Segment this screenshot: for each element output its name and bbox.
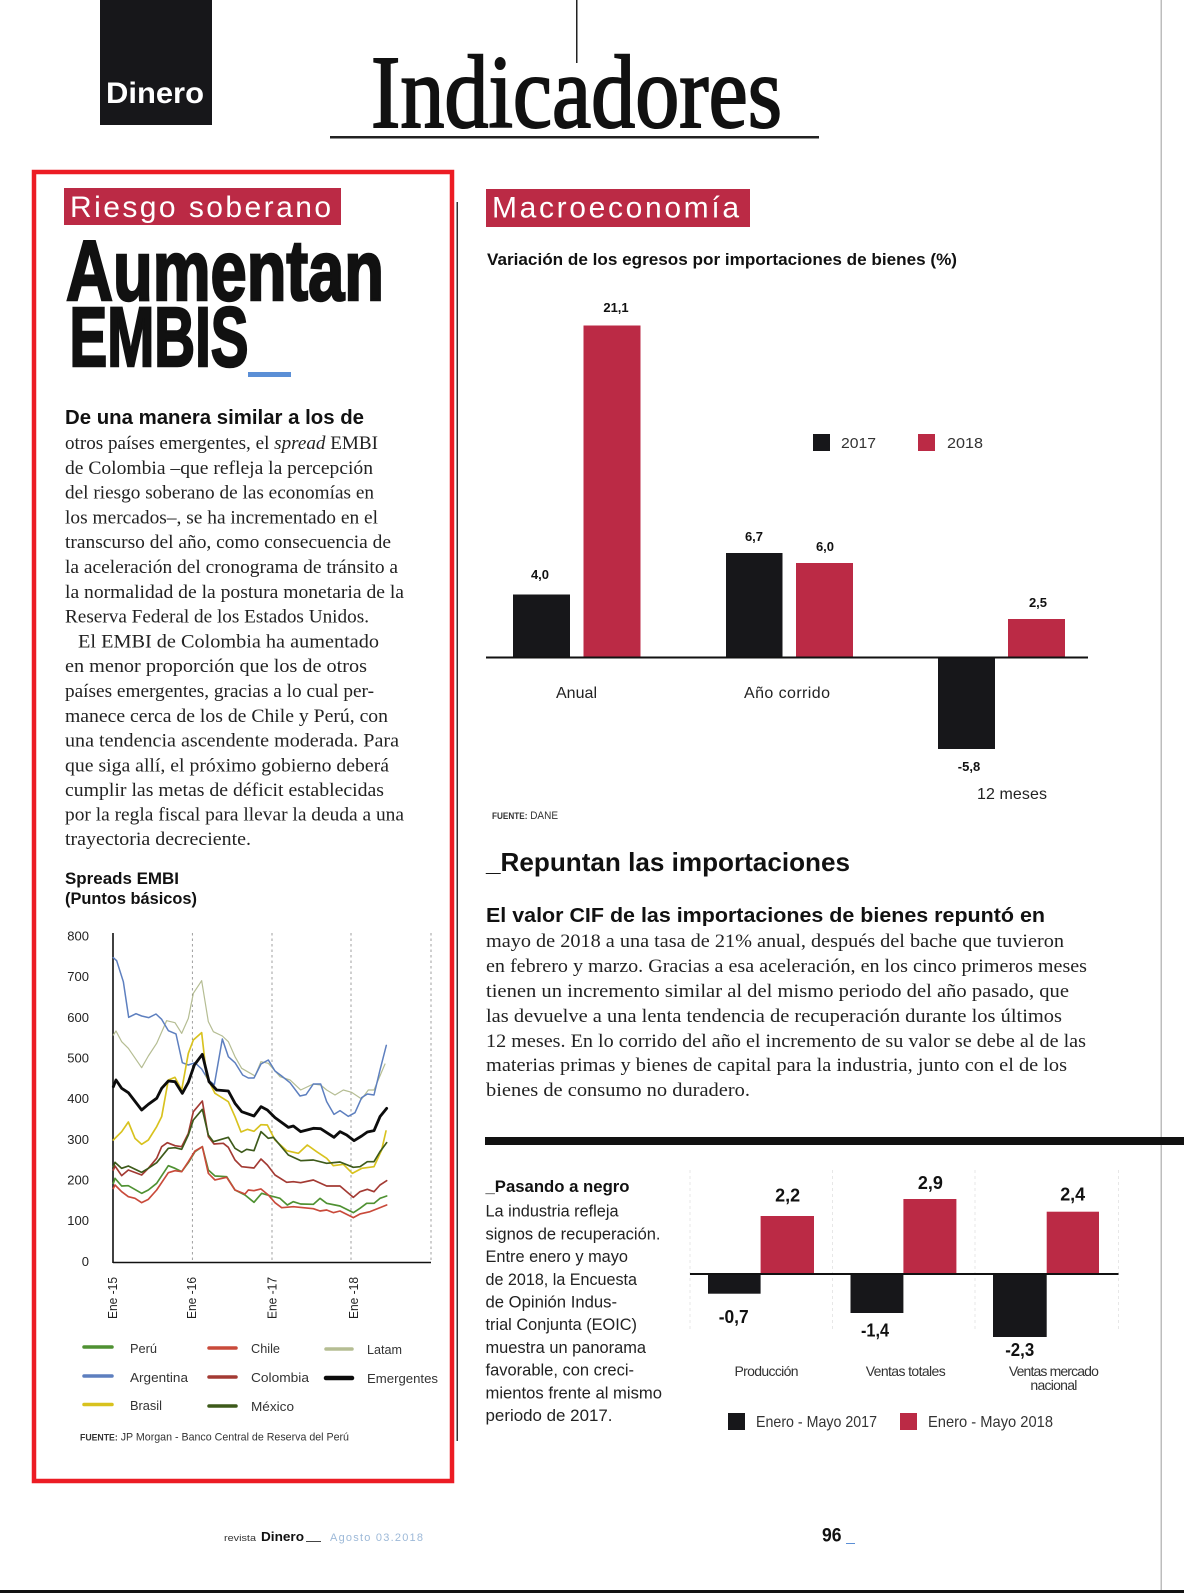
chart title: Spreads EMBI: (Puntos básicos): [65, 889, 197, 908]
article text: imports: mayo de 2018 a una tasa de 21% anual, después del bache que tuvieron: [486, 931, 1065, 952]
footer: magazine line and page number: [224, 1526, 855, 1547]
headline: Aumentan EMBIS: Aumentan: [66, 224, 384, 319]
y axis labels: 200: [67, 1172, 89, 1188]
article text: EMBI: países emergentes, gracias a lo cual per-: [65, 681, 374, 702]
bar chart: industry: Producción: [734, 1363, 798, 1379]
bar chart: imports variation: -5,8: [958, 759, 980, 774]
article text: EMBI: de Colombia –que refleja la percepción: [65, 458, 374, 479]
article text: EMBI: [65, 407, 405, 850]
y axis labels: 100: [67, 1213, 89, 1228]
chart legend: [728, 1413, 1053, 1431]
article text: EMBI: que siga allí, el próximo gobierno deberá: [65, 755, 390, 776]
headline: Aumentan EMBIS: [66, 224, 384, 384]
section tag: Riesgo soberano: Riesgo soberano: [70, 191, 331, 224]
sidebar text: Pasando a negro: Entre enero y mayo: [486, 1247, 628, 1266]
chart legend: Enero - Mayo 2018: [928, 1414, 1053, 1431]
y axis labels: 300: [67, 1132, 89, 1147]
bar chart: imports variation: 21,1: [603, 300, 629, 315]
bar chart: industry: 2,2: [775, 1186, 800, 1206]
y axis labels: 800: [67, 928, 89, 943]
sidebar text: Pasando a negro: mientos frente al mismo: [486, 1383, 662, 1402]
article text: EMBI: en menor proporción que los de otros: [65, 656, 367, 677]
article text: EMBI: los mercados–, se ha incrementado en el: [65, 507, 378, 528]
article text: EMBI: manece cerca de los de Chile y Perú, con: [65, 706, 389, 727]
footer: magazine line and page number: Agosto 03.2018: [330, 1532, 423, 1544]
section tag: Macroeconomía: Macroeconomía: [492, 192, 739, 224]
chart legend: Perú: [130, 1341, 157, 1356]
article text: EMBI: cumplir las metas de déficit establecidas: [65, 780, 384, 801]
chart title: Spreads EMBI: [65, 869, 197, 908]
bar chart: industry: -2,3: [1005, 1340, 1034, 1360]
article text: EMBI: transcurso del año, como consecuencia de: [65, 532, 391, 553]
bar chart: imports variation: [486, 300, 1088, 803]
chart legend: 2018: [947, 435, 983, 452]
sidebar text: Pasando a negro: periodo de 2017.: [486, 1406, 612, 1425]
chart legend: [813, 434, 983, 452]
chart legend: Emergentes: [367, 1371, 439, 1386]
sidebar text: Pasando a negro: [485, 1177, 662, 1425]
source note: FUENTE: JP Morgan - Banco Central de Reserva del Perú: [80, 1432, 349, 1444]
article text: imports: materias primas y bienes de capital para la industria, junto con el de los: [486, 1055, 1067, 1076]
bar chart: imports variation: 2,5: [1029, 595, 1047, 610]
bar chart: imports variation: Año corrido: [744, 685, 830, 702]
footer: magazine line and page number: 96: [822, 1526, 842, 1547]
y axis labels: 700: [67, 969, 89, 984]
sidebar text: Pasando a negro: muestra un panorama: [486, 1338, 647, 1357]
y axis labels: 0: [82, 1254, 89, 1269]
bar chart: industry: 2,9: [918, 1173, 943, 1193]
bar chart: industry: Ventas totales: [866, 1363, 946, 1379]
chart legend: Chile: [251, 1341, 280, 1356]
chart legend: Brasil: [130, 1398, 162, 1413]
chart legend: [84, 1341, 439, 1414]
article text: imports: bienes de consumo no duradero.: [486, 1080, 750, 1101]
article text: EMBI: trayectoria decreciente.: [65, 829, 251, 850]
article text: EMBI: El EMBI de Colombia ha aumentado: [78, 631, 379, 652]
chart legend: Argentina: [130, 1370, 189, 1385]
bar chart: industry: -0,7: [719, 1307, 749, 1327]
y axis labels: 600: [67, 1010, 89, 1025]
line chart: Spreads EMBI: [67, 928, 431, 1319]
bar chart: imports variation: 12 meses: [977, 786, 1047, 803]
article text: imports: El valor CIF de las importaciones de bienes repuntó en: [486, 905, 1045, 927]
x axis labels: Ene -15: [105, 1277, 120, 1319]
sidebar text: Pasando a negro: favorable, con creci-: [486, 1361, 634, 1380]
article text: imports: [486, 905, 1087, 1101]
chart legend: México: [251, 1399, 294, 1414]
headline: Aumentan EMBIS: EMBIS: [70, 290, 248, 384]
y axis labels: 500: [67, 1050, 89, 1066]
panel: Riesgo soberano: [34, 172, 452, 1481]
article text: imports: 12 meses. En lo corrido del año el incremento de su valor se debe al de las: [486, 1031, 1086, 1052]
bar chart: imports variation: Anual: [556, 685, 597, 702]
article text: EMBI: del riesgo soberano de las economías en: [65, 483, 374, 504]
y axis labels: 400: [67, 1091, 89, 1106]
article text: EMBI: una tendencia ascendente moderada. Para: [65, 731, 400, 752]
article text: imports: tienen un incremento similar al del mismo periodo del año pasado, que: [486, 981, 1069, 1002]
y axis labels: [67, 928, 89, 1269]
footer: magazine line and page number: revista: [224, 1533, 257, 1544]
bar chart: imports variation: 6,0: [816, 539, 834, 554]
source note: FUENTE: DANE: [492, 810, 558, 822]
heading: Repuntan las importaciones: _Repuntan las importaciones: [485, 847, 850, 877]
chart legend: Latam: [367, 1342, 402, 1357]
x axis labels: Ene -16: [184, 1277, 199, 1319]
article text: EMBI: por la regla fiscal para llevar la deuda a una: [65, 804, 405, 825]
sidebar text: Pasando a negro: signos de recuperación.: [486, 1224, 660, 1243]
chart legend: Enero - Mayo 2017: [756, 1414, 877, 1431]
sidebar text: Pasando a negro: de 2018, la Encuesta: [486, 1270, 638, 1289]
footer: magazine line and page number: Dinero: [261, 1529, 304, 1544]
article text: imports: en febrero y marzo. Gracias a esa aceleración, en los cinco primeros meses: [486, 956, 1087, 977]
x axis labels: Ene -18: [346, 1277, 361, 1319]
article text: EMBI: Reserva Federal de los Estados Unidos.: [65, 607, 369, 628]
chart title: Spreads EMBI: Spreads EMBI: [65, 869, 179, 888]
bar chart: industry: 2,4: [1060, 1185, 1085, 1205]
data series: [113, 958, 387, 1218]
bar chart: imports variation: 6,7: [745, 529, 763, 544]
header: section tab Dinero: [100, 0, 212, 125]
sidebar text: Pasando a negro: trial Conjunta (EOIC): [486, 1315, 637, 1334]
article text: EMBI: la aceleración del cronograma de tránsito a: [65, 557, 399, 578]
panel: Macroeconomía: [485, 189, 1184, 1431]
sidebar text: Pasando a negro: La industria refleja: [486, 1202, 619, 1221]
bar chart: industry: [690, 1170, 1118, 1431]
chart title: imports: Variación de los egresos por importaciones de bienes (%): [487, 250, 957, 269]
chart legend: 2017: [841, 435, 876, 452]
bar chart: imports variation: 4,0: [531, 567, 549, 582]
x axis labels: Ene -17: [265, 1277, 280, 1319]
bar chart: industry: Ventas mercado: [1009, 1363, 1099, 1379]
bar chart: industry: -1,4: [861, 1321, 889, 1341]
article text: imports: las devuelve a una lenta tendencia de recuperación durante los últimos: [486, 1006, 1062, 1027]
sidebar text: Pasando a negro: de Opinión Indus-: [486, 1293, 617, 1312]
article text: EMBI: la normalidad de la postura monetaria de la: [65, 582, 405, 603]
chart legend: Colombia: [251, 1370, 310, 1385]
header: section tab Dinero: Dinero: [106, 77, 204, 110]
article text: EMBI: De una manera similar a los de: [65, 407, 364, 429]
article text: EMBI: otros países emergentes, el spread EMBI: [65, 433, 378, 454]
sidebar text: Pasando a negro: _Pasando a negro: [485, 1177, 630, 1196]
x axis labels: [105, 1277, 361, 1319]
title: Indicadores: Indicadores: [371, 35, 782, 150]
bar chart: industry: nacional: [1030, 1377, 1077, 1393]
